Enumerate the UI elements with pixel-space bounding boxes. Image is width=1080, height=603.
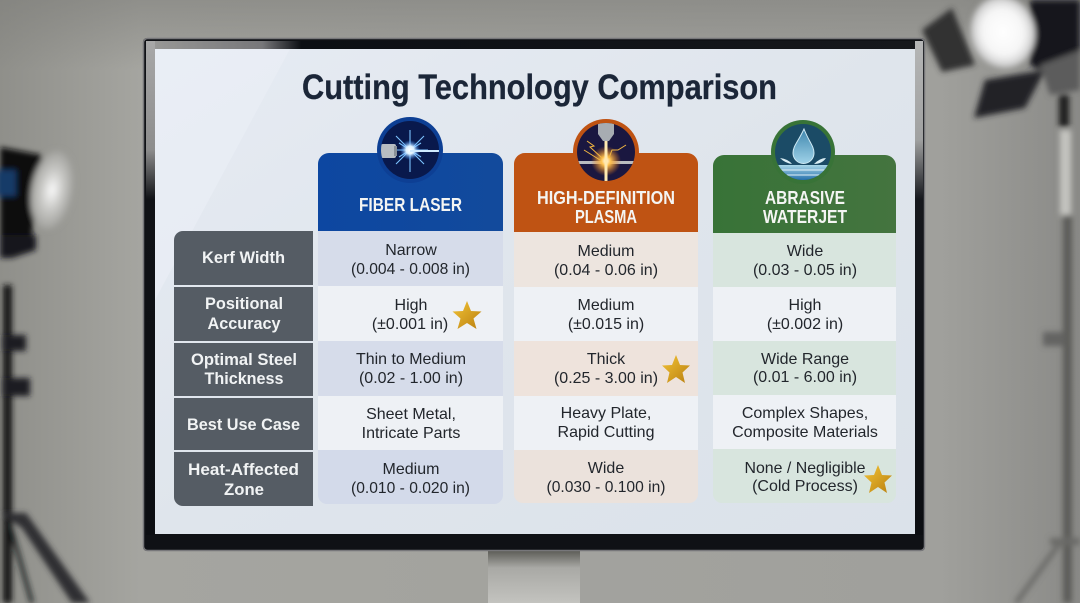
icon: plasma spark — [573, 119, 639, 185]
row cells: fiber laser — [318, 231, 503, 504]
cell: heat-affected zone: None / Negligible — [744, 460, 866, 477]
cell: positional accuracy: High — [395, 297, 427, 314]
cell: heat-affected zone — [318, 450, 503, 504]
right studio light — [922, 0, 1080, 603]
header: fiber laser: FIBER LASER — [359, 195, 462, 215]
cell: positional accuracy: (±0.015 in) — [568, 316, 644, 333]
header: waterjet: WATERJET — [763, 207, 847, 227]
label: positional accuracy: Accuracy — [208, 314, 281, 333]
cell: best use case: Composite Materials — [732, 424, 878, 441]
screen — [155, 49, 915, 534]
cell: kerf width: (0.04 - 0.06 in) — [554, 262, 658, 279]
cell: heat-affected zone: (0.030 - 0.100 in) — [546, 479, 666, 496]
label: kerf width: Kerf Width — [202, 248, 285, 267]
cell: best use case: Intricate Parts — [362, 425, 460, 442]
header: plasma: PLASMA — [575, 207, 637, 227]
cell: steel thickness: Thin to Medium — [356, 351, 466, 368]
label: optimal steel thickness — [174, 343, 313, 396]
cell: kerf width: (0.03 - 0.05 in) — [753, 262, 857, 279]
cell: heat-affected zone: Medium — [383, 461, 439, 478]
cell: heat-affected zone: (0.010 - 0.020 in) — [351, 480, 470, 497]
cell: heat-affected zone: (Cold Process) — [752, 478, 858, 495]
row cells: waterjet — [713, 233, 896, 503]
cell: kerf width: (0.004 - 0.008 in) — [351, 261, 470, 278]
column: fiber laser — [318, 117, 503, 504]
icon: star — [864, 465, 892, 493]
label: kerf width — [174, 231, 313, 285]
cell: positional accuracy: (±0.002 in) — [767, 316, 843, 333]
header: waterjet — [713, 155, 896, 233]
cell: kerf width: Wide — [787, 243, 823, 260]
header: plasma: HIGH-DEFINITION — [537, 188, 675, 208]
cell: kerf width: Medium — [578, 243, 634, 260]
label: heat-affected zone: Heat-Affected — [188, 460, 299, 479]
cell: positional accuracy — [514, 287, 698, 341]
row cells: plasma — [514, 232, 698, 503]
icon: star — [662, 355, 690, 383]
cell: best use case: Sheet Metal, — [366, 406, 456, 423]
monitor stand — [488, 549, 580, 603]
cell: positional accuracy — [318, 286, 503, 341]
cell: best use case — [514, 396, 698, 450]
cell: heat-affected zone: Wide — [588, 460, 624, 477]
cell: best use case: Rapid Cutting — [558, 424, 654, 441]
label: best use case: Best Use Case — [187, 415, 300, 434]
left studio light — [0, 147, 90, 603]
header: plasma — [514, 153, 698, 232]
cell: positional accuracy: (±0.001 in) — [372, 316, 448, 333]
cell: kerf width — [318, 231, 503, 286]
cell: steel thickness — [514, 341, 698, 396]
column: high-definition plasma — [514, 119, 698, 503]
cell: kerf width — [514, 232, 698, 287]
label: heat-affected zone: Zone — [224, 480, 264, 499]
cell: steel thickness — [318, 341, 503, 396]
header: waterjet: ABRASIVE — [765, 188, 845, 208]
column: abrasive waterjet — [713, 120, 896, 503]
cell: best use case — [318, 396, 503, 450]
row labels — [174, 231, 313, 506]
label: optimal steel thickness: Optimal Steel — [191, 350, 297, 369]
label: optimal steel thickness: Thickness — [204, 369, 284, 388]
label: positional accuracy — [174, 287, 313, 341]
header: fiber laser — [318, 153, 503, 231]
icon: laser burst — [377, 117, 443, 183]
cell: steel thickness: Wide Range — [761, 351, 849, 368]
cell: positional accuracy: Medium — [578, 297, 634, 314]
monitor frame — [143, 38, 925, 551]
label: best use case — [174, 398, 313, 450]
cell: steel thickness: (0.01 - 6.00 in) — [753, 369, 857, 386]
icon: star — [452, 301, 482, 329]
cell: steel thickness: (0.25 - 3.00 in) — [554, 370, 658, 387]
cell: positional accuracy — [713, 287, 896, 341]
cell: heat-affected zone — [713, 449, 896, 503]
cell: kerf width — [713, 233, 896, 287]
cell: steel thickness: (0.02 - 1.00 in) — [359, 370, 463, 387]
cell: heat-affected zone — [514, 450, 698, 503]
cell: best use case: Heavy Plate, — [561, 405, 651, 422]
cell: steel thickness — [713, 341, 896, 395]
cell: best use case — [713, 395, 896, 449]
cell: kerf width: Narrow — [385, 242, 437, 259]
title: Cutting Technology Comparison — [302, 68, 777, 107]
label: positional accuracy: Positional — [205, 294, 283, 313]
cell: steel thickness: Thick — [587, 351, 626, 368]
label: heat-affected zone — [174, 452, 313, 506]
cell: best use case: Complex Shapes, — [742, 405, 868, 422]
icon: water drop — [771, 120, 835, 184]
cell: positional accuracy: High — [789, 297, 821, 314]
